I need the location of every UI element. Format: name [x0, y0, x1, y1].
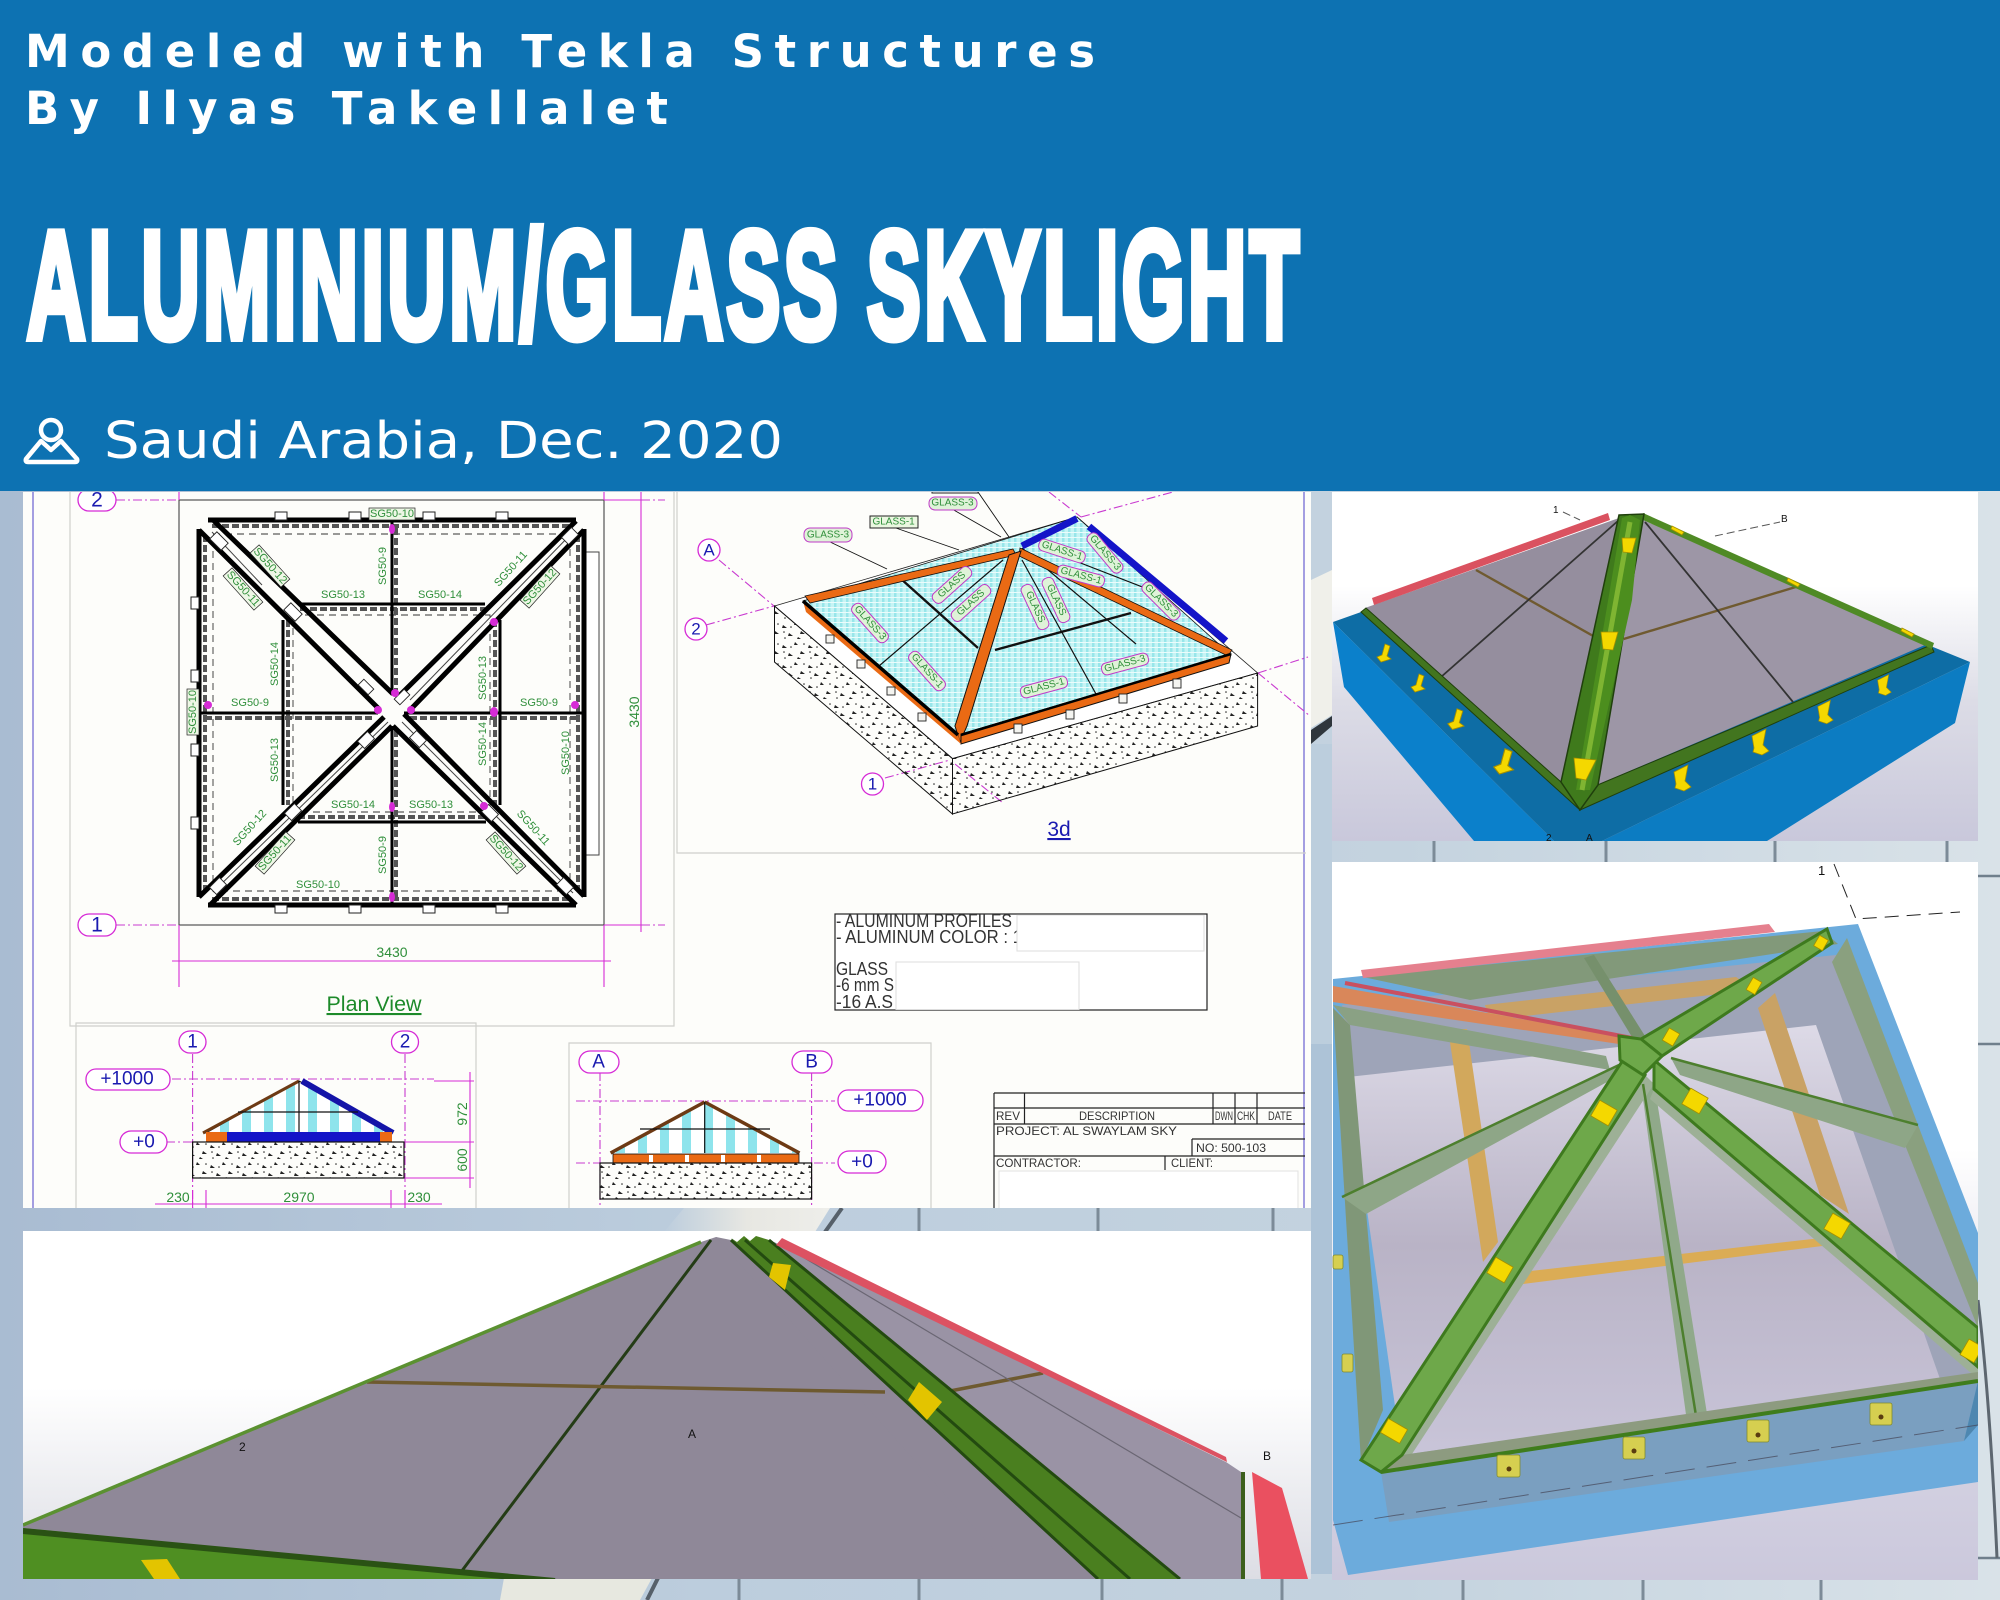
grid annotations: 2	[1546, 833, 1552, 844]
panel: rendered close-up elevation, bottom	[23, 1231, 1311, 1579]
header banner	[0, 0, 2000, 491]
red and orange ridge cap	[1333, 924, 1775, 1044]
plan view member labels: SG50-14	[418, 589, 462, 601]
blue base block	[1333, 924, 1978, 1575]
plan view member labels: SG50-13	[409, 799, 453, 811]
plan view dimensions and grid bubbles: 3430	[626, 696, 642, 728]
translucent frame members	[1333, 931, 1978, 1472]
title block: CHK	[1237, 1109, 1255, 1123]
plan view member labels: SG50-12	[231, 808, 269, 848]
section view 1-2: 972	[454, 1102, 470, 1126]
red fascia strips	[776, 1238, 1308, 1579]
plan view dimensions and grid bubbles: 3430	[376, 944, 408, 960]
glass interior	[1342, 955, 1978, 1455]
blue concrete base	[1333, 520, 1970, 841]
title block: DESCRIPTION	[1079, 1109, 1155, 1123]
section view 1-2: 230	[166, 1189, 190, 1205]
3d view drawing: GLASS-1	[1059, 565, 1103, 587]
plan view member labels: SG50-13	[269, 738, 281, 782]
glass faces	[23, 1237, 1241, 1579]
3d view drawing: GLASS-1	[872, 516, 915, 528]
panel: rendered exterior view, top right	[1332, 492, 1978, 844]
section view 1-2: 230	[407, 1189, 431, 1205]
section view 1-2: 2	[400, 1032, 410, 1052]
plan view caption: Plan View	[326, 993, 422, 1016]
title block: DWN	[1215, 1109, 1233, 1123]
plan view dimensions and grid bubbles: 2	[91, 488, 103, 512]
plan view member labels: SG50-14	[331, 799, 375, 811]
plan view member labels: SG50-11	[224, 569, 262, 609]
material notes box: - ALUMINUM COLOR : 1	[836, 927, 1022, 947]
plan view member labels: SG50-12	[521, 567, 559, 607]
title block: REV	[996, 1109, 1020, 1123]
3d view drawing: 2	[691, 620, 701, 638]
plan view member labels: SG50-11	[492, 549, 530, 589]
plan view member labels: SG50-14	[269, 642, 281, 686]
title block	[994, 1093, 1305, 1221]
section view 1-2: +1000	[100, 1068, 154, 1090]
3d view drawing: GLASS-1	[909, 652, 946, 691]
section view A-B: +0	[851, 1152, 873, 1172]
panel: CAD drawing sheet	[23, 488, 1311, 1208]
title block: NO: 500-103	[1196, 1141, 1266, 1155]
section view A-B: +1000	[853, 1090, 907, 1110]
section view 1-2: +0	[133, 1132, 155, 1152]
section view 1-2: 600	[454, 1148, 470, 1172]
section view A-B	[576, 1051, 923, 1208]
3d view drawing: GLASS-3	[1142, 582, 1180, 620]
section view A-B: B	[805, 1052, 818, 1072]
3d view drawing: GLASS-1	[1022, 676, 1066, 698]
plan view member labels: SG50-12	[251, 546, 289, 586]
plan view member labels: SG50-9	[520, 697, 558, 709]
grid annotations	[1546, 505, 1788, 844]
green ridge member	[731, 1236, 1180, 1579]
plan view member labels: SG50-13	[321, 589, 365, 601]
glass panes	[1365, 518, 1925, 785]
material notes box: -6 mm S	[836, 975, 894, 995]
aluminium frame and ridges	[1361, 513, 1934, 810]
plan view member labels: SG50-13	[477, 656, 489, 700]
3d view drawing: GLASS	[1023, 590, 1047, 625]
plan view member labels: SG50-9	[377, 836, 389, 874]
grid letters: B	[1263, 1449, 1271, 1463]
3d view caption: 3d	[1047, 818, 1071, 841]
subtitle: modeling credit: Modeled with Tekla Structures	[25, 25, 1095, 78]
grid letters: A	[688, 1427, 696, 1441]
material notes box: - ALUMINUM PROFILES	[836, 911, 1012, 931]
section view 1-2: 2970	[283, 1189, 315, 1205]
3d view drawing	[685, 480, 1310, 814]
grid annotations: 1	[1553, 505, 1559, 516]
green diagonal ridges	[1361, 929, 1978, 1472]
plan view member labels: SG50-12	[487, 833, 525, 873]
plan view member labels: SG50-10	[370, 508, 414, 520]
subtitle: author: By Ilyas Takellalet	[25, 82, 668, 135]
panel: x-ray structural view, bottom right	[1332, 862, 1978, 1580]
3d view drawing: GLASS	[1044, 583, 1068, 618]
3d view drawing: GLASS-3	[1103, 653, 1147, 675]
yellow clips	[1377, 526, 1914, 791]
3d view drawing: GLASS	[936, 570, 968, 600]
plan view member labels: SG50-9	[377, 547, 389, 585]
3d view drawing: GLASS-3	[931, 498, 974, 508]
title block: CONTRACTOR:	[996, 1156, 1081, 1170]
mullions and transoms	[23, 1240, 1241, 1572]
plan view member labels	[187, 508, 572, 891]
lower-left green frame	[23, 1528, 555, 1581]
section view 1-2: 1	[187, 1032, 198, 1052]
3d view drawing: GLASS-1	[1040, 539, 1084, 563]
material notes box: GLASS	[836, 959, 888, 979]
section view A-B: A	[592, 1052, 605, 1072]
3d view drawing: GLASS-3	[807, 530, 850, 540]
location and date: Saudi Arabia, Dec. 2020	[104, 412, 783, 471]
plan view dimensions and grid bubbles: 1	[91, 914, 103, 936]
title block: PROJECT: AL SWAYLAM SKY	[996, 1124, 1177, 1138]
grid letters	[239, 1427, 1271, 1463]
3d view drawing: 1	[868, 774, 877, 794]
3d view drawing: GLASS-3	[852, 604, 889, 643]
grid letters: 2	[239, 1440, 246, 1454]
anchor tabs	[1333, 1255, 1892, 1477]
plan view member labels: SG50-11	[256, 833, 294, 873]
plan view dimensions and grid bubbles	[78, 488, 665, 987]
grid annotation	[1333, 863, 1978, 1525]
3d view drawing: GLASS	[955, 588, 987, 618]
plan view member labels: SG50-10	[187, 690, 199, 734]
plan view member labels: SG50-14	[477, 722, 489, 766]
plan view member labels: SG50-10	[560, 731, 572, 775]
3d view drawing: GLASS-3	[1087, 533, 1123, 573]
3d view drawing: A	[703, 540, 715, 560]
plan view member labels: SG50-11	[514, 808, 552, 848]
title block: CLIENT:	[1171, 1156, 1213, 1170]
section view 1-2	[86, 1031, 474, 1208]
material notes box	[835, 911, 1207, 1012]
material notes box: -16 A.S	[836, 992, 893, 1012]
grid annotations: A	[1586, 833, 1593, 844]
orange transoms	[1448, 977, 1849, 1285]
icon: map pin	[26, 420, 77, 462]
grid annotations: B	[1781, 514, 1788, 525]
grid annotation: 1	[1818, 863, 1825, 878]
title block: DATE	[1268, 1109, 1292, 1123]
yellow clip markers	[1380, 935, 1983, 1443]
plan view member labels: SG50-9	[231, 697, 269, 709]
main title: ALUMINIUM/GLASS SKYLIGHT	[27, 200, 1299, 370]
plan view member labels: SG50-10	[296, 879, 340, 891]
plan view drawing	[179, 500, 604, 925]
